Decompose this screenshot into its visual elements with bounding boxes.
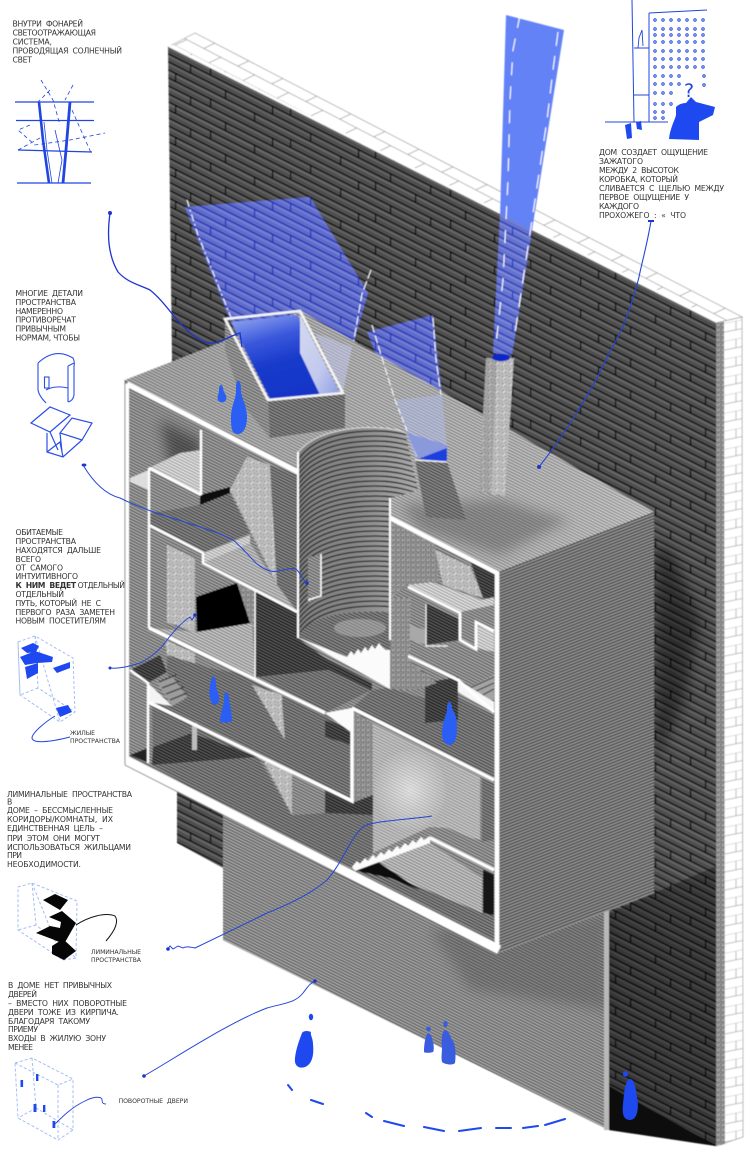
text: inhabited spaces: ВСЕГО — [16, 555, 41, 564]
brick wall end face — [716, 317, 743, 1146]
text: inhabited spaces: ОТ САМОГО — [16, 564, 63, 572]
speckled pier — [167, 545, 195, 632]
brick wall cap — [168, 33, 742, 323]
bottom room back wall — [353, 843, 482, 913]
text: doors: ПРИЕМУ — [8, 1025, 38, 1034]
text: inhabited spaces: ОБИТАЕМЫЕ — [16, 528, 63, 537]
bottom floor — [353, 870, 494, 940]
leader: skylight — [109, 213, 242, 347]
text: first impression: ДОМ СОЗДАЕТ ОЩУЩЕНИЕ — [599, 148, 708, 157]
diagram: liminal spaces — [18, 883, 77, 960]
text: lanterns: СИСТЕМА, — [12, 38, 52, 47]
text: doors: – ВМЕСТО НИХ ПОВОРОТНЫЕ — [8, 999, 127, 1008]
text: lanterns: ВНУТРИ ФОНАРЕЙ — [12, 20, 83, 29]
text: lanterns: ПРОВОДЯЩАЯ СОЛНЕЧНЫЙ — [12, 46, 122, 55]
lower room back wall — [152, 705, 262, 759]
text: details: ПРИВЫЧНЫМ — [16, 324, 66, 334]
blue figures under lower volume — [424, 1021, 456, 1065]
sketch: person looking up at towers: ? — [684, 80, 694, 102]
text: details: НОРМАМ, ЧТОБЫ — [16, 334, 80, 342]
section interior — [125, 380, 499, 953]
slab surface — [203, 543, 297, 612]
text: liminal spaces: В — [7, 798, 12, 806]
small skylight — [407, 433, 466, 520]
text: first impression: ЗАЖАТОГО — [599, 157, 643, 166]
text: doors: ВХОДЫ В ЖИЛУЮ ЗОНУ — [8, 1034, 106, 1043]
text: inhabited spaces: НАХОДЯТСЯ ДАЛЬШЕ — [16, 546, 101, 555]
text: inhabited spaces: ПРОСТРАНСТВА — [16, 537, 77, 546]
label: liminal spaces — [91, 949, 142, 964]
dark brick wall — [168, 46, 717, 1146]
text: doors: ДВЕРИ ТОЖЕ ИЗ КИРПИЧА. — [8, 1008, 119, 1017]
zigzag stairs — [352, 836, 430, 871]
stairs — [148, 675, 187, 706]
text: liminal spaces: ЛИМИНАЛЬНЫЕ ПРОСТРАНСТВА — [7, 790, 133, 799]
label: living spaces: ЖИЛЫЕ — [70, 730, 95, 737]
blue figure right room — [442, 702, 457, 745]
chimney — [479, 354, 514, 496]
pier — [192, 723, 197, 750]
label: liminal spaces: ЛИМИНАЛЬНЫЕ — [91, 949, 141, 956]
label: living spaces: ПРОСТРАНСТВА — [70, 738, 121, 745]
white stair band beside cylinder — [297, 637, 390, 689]
label: revolving doors: ПОВОРОТНЫЕ ДВЕРИ — [118, 1098, 188, 1105]
upper-left wedge of lower room — [130, 655, 167, 683]
text: details — [16, 289, 83, 342]
triangle column — [262, 758, 292, 815]
grey wall panel — [201, 430, 248, 495]
dark box — [282, 700, 325, 740]
text: first impression: КОРОБКА, КОТОРЫЙ — [599, 175, 678, 184]
shadow under slab — [325, 790, 373, 815]
text: doors: В ДОМЕ НЕТ ПРИВЫЧНЫХ — [8, 981, 113, 990]
text: liminal spaces: ЕДИНСТВЕННАЯ ЦЕЛЬ – — [7, 824, 103, 833]
middle left room floor — [150, 493, 250, 553]
label: liminal spaces: ПРОСТРАНСТВА — [91, 957, 142, 964]
light beam from chimney — [493, 15, 564, 355]
text: liminal spaces: ПРИ ЭТОМ ОНИ МОГУТ — [7, 834, 100, 843]
box outer frame — [125, 380, 499, 955]
text: first impression: ПЕРВОЕ ОЩУЩЕНИЕ У — [599, 193, 689, 202]
text: liminal spaces: НЕОБХОДИМОСТИ. — [7, 860, 81, 869]
column beside band — [390, 640, 437, 690]
text: first impression: СЛИВАЕТСЯ С ЩЕЛЬЮ МЕЖДУ — [599, 184, 724, 193]
leader: spaces — [83, 465, 307, 583]
sketch: lantern section — [15, 80, 105, 183]
text: details: ПРОТИВОРЕЧАТ — [16, 316, 76, 324]
text: inhabited spaces: ОТДЕЛЬНЫЙ — [16, 590, 64, 599]
light plane from small skylight — [367, 315, 442, 400]
text: lanterns — [12, 20, 122, 64]
lit floor — [150, 623, 255, 677]
slab shadow — [328, 660, 372, 690]
text: liminal spaces — [7, 790, 133, 869]
lower volume face — [223, 790, 609, 1130]
leader: liminal — [167, 816, 432, 950]
text: first impression — [599, 148, 724, 220]
text: lanterns: СВЕТ — [12, 55, 32, 64]
leader end marks — [82, 211, 654, 1078]
left column lower — [130, 677, 148, 763]
text: doors: МЕНЕЕ — [8, 1043, 33, 1052]
leader: liminal label — [76, 915, 117, 941]
leader: roof — [539, 221, 651, 467]
cylinder slit — [308, 554, 321, 604]
floor above white slab — [352, 683, 494, 778]
roof — [125, 311, 654, 572]
back wall — [150, 470, 200, 513]
black opening — [196, 583, 252, 632]
text: first impression: МЕЖДУ 2 ВЫСОТОК — [599, 166, 680, 175]
black strip — [483, 870, 494, 915]
text: lanterns: СВЕТООТРАЖАЮЩАЯ — [12, 29, 96, 38]
dark volume — [256, 590, 328, 677]
dark wall — [270, 465, 297, 610]
text: doors: ДВЕРЕЙ — [8, 990, 37, 999]
dashed door swing — [288, 1085, 565, 1131]
text: details: МНОГИЕ ДЕТАЛИ — [16, 289, 83, 298]
text: liminal spaces: ИСПОЛЬЗОВАТЬСЯ ЖИЛЬЦАМИ — [7, 843, 131, 852]
light plane from large skylight — [185, 197, 371, 380]
text: doors — [8, 981, 127, 1052]
roof light from skylights — [315, 318, 447, 458]
cut lines — [130, 430, 494, 870]
leader: black opening — [110, 615, 195, 668]
blue figures on roof — [218, 381, 247, 434]
speckled side — [237, 583, 255, 628]
slab end face — [352, 710, 373, 803]
leader: doors — [144, 981, 315, 1076]
text: doors: БЛАГОДАРЯ ТАКОМУ — [8, 1017, 90, 1026]
sketch: folded surfaces — [31, 407, 92, 457]
shadow slit — [200, 487, 230, 505]
sketch: person looking up at towers — [605, 0, 715, 140]
box top — [149, 450, 201, 495]
text: inhabited spaces: ИНТУИТИВНОГО — [16, 572, 78, 581]
sketch: revolving door drum — [38, 354, 74, 403]
text: inhabited spaces: К НИМ ВЕДЕТ ОТДЕЛЬНЫЙ — [16, 581, 125, 590]
curved brick cylinder — [298, 426, 418, 656]
back wall of figure room — [167, 655, 258, 700]
blue figures at street level — [295, 1014, 313, 1068]
text: liminal spaces: ПРИ — [7, 851, 22, 860]
large skylight — [225, 311, 345, 438]
floor above zigzag — [373, 827, 494, 870]
label: living spaces — [70, 730, 121, 745]
diagonal column — [230, 457, 277, 585]
text: details: НАМЕРЕННО — [16, 307, 63, 316]
lower room rear floor — [152, 733, 258, 765]
floor of figure room — [148, 672, 352, 800]
box right face — [499, 512, 654, 953]
blue figure at wall — [623, 1071, 638, 1120]
light pier — [165, 640, 195, 665]
diagram: revolving doors — [15, 1058, 73, 1140]
text: inhabited spaces: ПУТЬ, КОТОРЫЙ НЕ С — [16, 599, 101, 608]
text: first impression: ПРОХОЖЕГО : « ЧТО — [599, 211, 686, 220]
leader: door label — [54, 1097, 106, 1125]
wedge — [130, 748, 148, 763]
diagonal beam — [252, 685, 285, 740]
dark strip — [482, 778, 494, 842]
text: first impression: КАЖДОГО — [599, 202, 639, 211]
text: details: ПРОСТРАНСТВА — [16, 298, 77, 307]
diagram: living spaces — [18, 636, 75, 722]
big lower floor — [152, 757, 373, 868]
pier box — [292, 773, 325, 815]
text: liminal spaces: ДОМЕ – БЕССМЫСЛЕННЫЕ — [7, 806, 113, 815]
slab floor — [258, 670, 372, 713]
ledge — [203, 535, 250, 563]
right room — [390, 518, 495, 743]
text: inhabited spaces: ПЕРВОГО РАЗА ЗАМЕТЕН — [16, 608, 115, 617]
text: inhabited spaces — [16, 528, 125, 626]
behind box — [325, 720, 352, 745]
text: inhabited spaces: НОВЫМ ПОСЕТИТЕЛЯМ — [16, 616, 106, 626]
dark wedge — [353, 862, 420, 890]
blue figures in lower room — [209, 676, 232, 723]
lit back wall — [373, 723, 480, 853]
upper left room — [130, 392, 201, 495]
text: liminal spaces: КОРИДОРЫ/КОМНАТЫ, ИХ — [7, 815, 114, 824]
leader: living spaces — [32, 716, 70, 742]
